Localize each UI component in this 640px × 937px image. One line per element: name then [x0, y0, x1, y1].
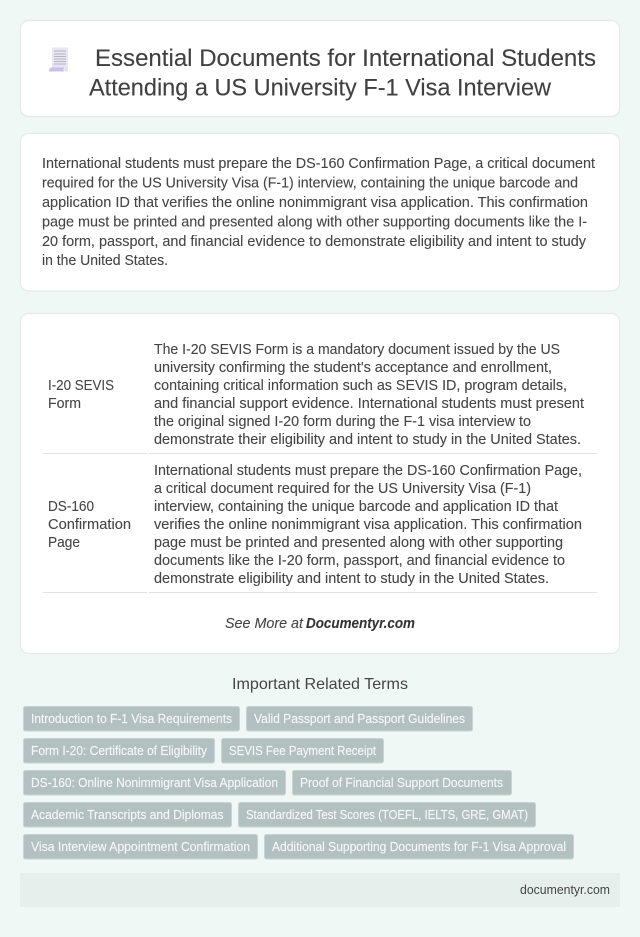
text block: introduction paragraph: 20 form, passport, and financial evidence to demonstrate eligibility and intent to study — [42, 234, 587, 250]
text block: introduction paragraph — [42, 156, 595, 269]
tag — [24, 834, 258, 859]
table row: I-20 SEVIS Form: university confirming the student's acceptance and enrollment, — [154, 360, 552, 376]
tag: Valid Passport and Passport Guidelines — [254, 712, 465, 726]
icon: document scroll — [49, 48, 68, 72]
table row: DS-160 Confirmation Page: DS-160 — [48, 499, 94, 515]
title — [89, 45, 596, 102]
table row: I-20 SEVIS Form: The I-20 SEVIS Form is a mandatory document issued by the US — [154, 342, 560, 358]
footer: documentyr.com — [520, 883, 610, 897]
table row: DS-160 Confirmation Page: verifies the online nonimmigrant visa application. This confirmation — [154, 517, 582, 533]
title: Essential Documents for International Students — [95, 45, 596, 72]
table row: DS-160 Confirmation Page — [43, 463, 597, 593]
text block: introduction paragraph: application ID that verifies the online nonimmigrant visa application. This confirmation — [42, 195, 588, 211]
tag — [222, 738, 384, 763]
panel: document table — [20, 314, 620, 654]
table row: DS-160 Confirmation Page: International students must prepare the DS-160 Confirmation Page, — [154, 463, 582, 479]
table row: I-20 SEVIS Form — [43, 342, 597, 454]
table row: I-20 SEVIS Form: Form — [48, 396, 81, 412]
see more link: Documentyr.com — [306, 616, 415, 632]
tag — [246, 706, 472, 731]
table row: I-20 SEVIS Form: I-20 SEVIS — [48, 378, 114, 394]
tag: Introduction to F-1 Visa Requirements — [31, 712, 232, 726]
tag — [24, 802, 232, 827]
table row: DS-160 Confirmation Page: Confirmation — [48, 517, 131, 533]
tag — [24, 706, 240, 731]
tag — [24, 770, 286, 795]
tag: SEVIS Fee Payment Receipt — [229, 744, 376, 758]
text block: introduction paragraph: page must be printed and presented along with other supporting documents like the I- — [42, 214, 587, 230]
tag: Additional Supporting Documents for F-1 Visa Approval — [272, 840, 566, 854]
tag: Form I-20: Certificate of Eligibility — [31, 744, 208, 758]
see more link — [225, 616, 415, 632]
tag — [292, 770, 512, 795]
see more link: See More at — [225, 616, 304, 632]
table row: I-20 SEVIS Form: the original signed I-20 form during the F-1 visa interview to — [154, 414, 531, 430]
tag: Proof of Financial Support Documents — [300, 776, 503, 790]
panel: related term tags — [24, 706, 574, 859]
text block: introduction paragraph: in the United States. — [42, 253, 168, 269]
tag: Academic Transcripts and Diplomas — [31, 808, 224, 822]
panel: introduction — [20, 134, 620, 291]
text block: introduction paragraph: International students must prepare the DS-160 Confirmation Page, a critical document — [42, 156, 595, 172]
footer — [20, 873, 620, 907]
tag: Standardized Test Scores (TOEFL, IELTS, GRE, GMAT) — [246, 808, 528, 822]
tag — [264, 834, 574, 859]
title: Attending a US University F-1 Visa Interview — [89, 74, 552, 102]
table row: DS-160 Confirmation Page: a critical document required for the US University Visa (F-1) — [154, 481, 531, 497]
table row: DS-160 Confirmation Page: page must be printed and presented along with other supporting — [154, 535, 563, 551]
table row: DS-160 Confirmation Page: Page — [48, 535, 80, 551]
table row: I-20 SEVIS Form: demonstrate their eligibility and intent to study in the United States. — [154, 432, 581, 448]
tag: Visa Interview Appointment Confirmation — [31, 840, 250, 854]
table row: DS-160 Confirmation Page: interview, containing the unique barcode and application ID that — [154, 499, 558, 515]
table row: DS-160 Confirmation Page: demonstrate eligibility and intent to study in the United States. — [154, 571, 549, 587]
tag — [238, 802, 536, 827]
table row: DS-160 Confirmation Page: documents like the I-20 form, passport, and financial evidence to — [154, 553, 565, 569]
text block: introduction paragraph: required for the US University Visa (F-1) interview, containing the unique barcode and — [42, 176, 578, 192]
tag — [24, 738, 214, 763]
heading: important related terms: Important Related Terms — [232, 676, 408, 693]
table row: I-20 SEVIS Form: and financial support evidence. International students must present — [154, 396, 584, 412]
tag: DS-160: Online Nonimmigrant Visa Application — [31, 776, 278, 790]
table row: I-20 SEVIS Form: containing critical information such as SEVIS ID, program details, — [154, 378, 567, 394]
panel: title header — [20, 20, 620, 116]
